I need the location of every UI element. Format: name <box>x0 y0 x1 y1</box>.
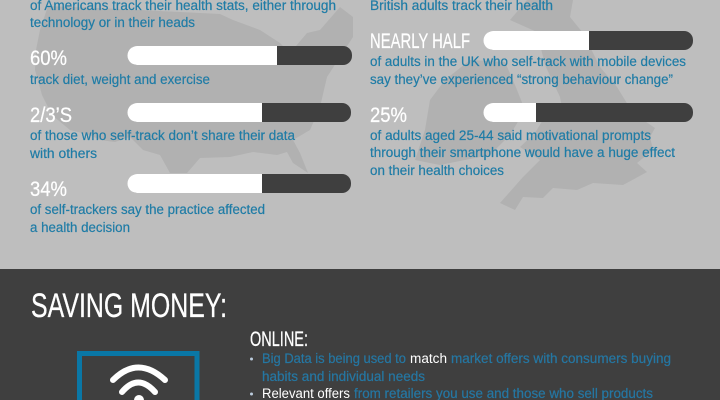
stat: 34%: 34% <box>30 178 67 201</box>
stat: 2/3's: 2/3’S <box>30 104 72 127</box>
icon: wifi screen <box>80 354 197 400</box>
stat: nearly half: of adults in the UK who self-track with mobile devices <box>370 54 686 69</box>
stat: 2/3's: with others <box>29 146 97 161</box>
stat: 60% <box>30 46 352 87</box>
stat: 34% <box>30 174 351 235</box>
stat: 25%: of adults aged 25-44 said motivational prompts <box>370 128 651 143</box>
stat: 25%: 25% <box>370 104 407 127</box>
text block: Americans tracking: technology or in their heads <box>30 15 195 30</box>
stat: 60%: 60% <box>30 47 67 70</box>
stat: 2/3's: of those who self-track don’t share their data <box>30 128 295 143</box>
list: online bullets: Big Data is being used to <box>262 351 406 366</box>
text block: Americans tracking <box>30 0 336 30</box>
stat: nearly half: NEARLY HALF <box>370 30 470 53</box>
stat: 2/3's <box>29 103 351 161</box>
stat: 25%: on their health choices <box>370 163 504 178</box>
list: online bullets: habits and individual needs <box>262 369 425 384</box>
stat: 25%: through their smartphone would have a huge effect <box>370 145 675 160</box>
stat: nearly half <box>370 30 693 87</box>
stat: 34%: of self-trackers say the practice affected <box>30 202 265 217</box>
heading: saving money: SAVING MONEY: <box>31 287 227 325</box>
subheading: online: ONLINE: <box>250 328 308 351</box>
list: online bullets <box>250 351 671 400</box>
stat: nearly half: say they’ve experienced “strong behaviour change” <box>370 72 673 87</box>
map: United States <box>35 6 353 173</box>
stat: 25% <box>370 103 693 178</box>
map: United Kingdom and Ireland <box>415 0 655 210</box>
panel: self-tracking statistics <box>0 0 720 269</box>
panel: saving money <box>0 269 720 400</box>
stat: 60%: track diet, weight and exercise <box>30 72 210 87</box>
stat: 34%: a health decision <box>30 220 130 235</box>
list: online bullets: market offers with consumers buying <box>451 351 671 366</box>
list: online bullets: match <box>410 351 447 366</box>
